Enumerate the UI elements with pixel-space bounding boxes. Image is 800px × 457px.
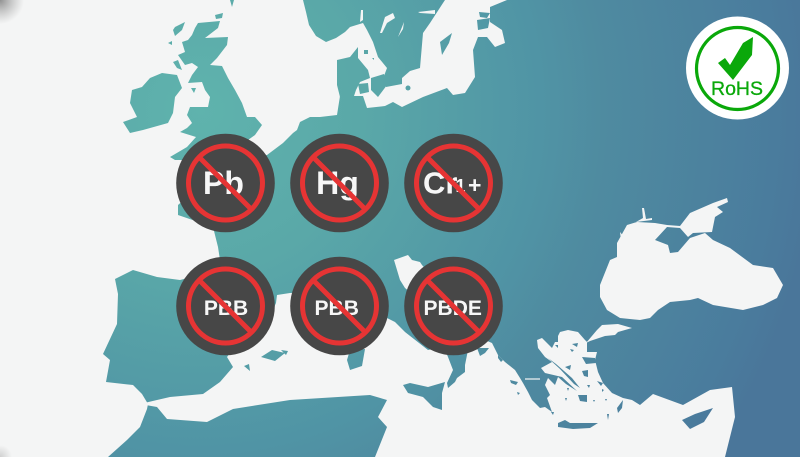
Estonian islands xyxy=(477,12,490,30)
map: Black Sea spikes xyxy=(620,208,652,240)
badge: Cr: 1 xyxy=(456,176,466,196)
map: Atlantic, North Sea and Baltic xyxy=(0,0,507,457)
Evia gulf xyxy=(548,358,580,388)
icon: check mark xyxy=(718,37,753,80)
badge: Hg xyxy=(290,134,389,232)
Ireland xyxy=(123,73,182,133)
badge: PBB right: PBB xyxy=(315,297,359,320)
Aegean islands xyxy=(498,335,607,415)
badge: PBB left: PBB xyxy=(204,297,248,320)
Swedish lakes xyxy=(360,10,435,37)
Kattegat islet dots xyxy=(364,50,374,60)
RoHS compliance badge: RoHS xyxy=(711,78,763,100)
Hebrides and northern islands xyxy=(168,0,234,93)
map: Mediterranean, Adriatic and Aegean xyxy=(140,255,735,457)
Gulf of Corinth xyxy=(525,378,540,380)
Jutland xyxy=(337,47,370,97)
badge: PBDE xyxy=(404,257,503,355)
corner vignette xyxy=(0,0,24,24)
badge: Pb xyxy=(176,134,275,232)
Crete xyxy=(558,420,598,429)
badge: Hg: Hg xyxy=(316,165,359,201)
map: Black Sea and Azov xyxy=(600,198,783,320)
map: Marmara xyxy=(586,324,632,343)
Gotland xyxy=(440,33,452,55)
badge: PBDE: PBDE xyxy=(424,297,482,320)
badge: Pb: Pb xyxy=(203,165,244,201)
badge: PBB right xyxy=(290,257,389,355)
Sardinia xyxy=(347,349,365,370)
badge: PBB left xyxy=(176,257,275,355)
badge: Cr xyxy=(404,134,503,232)
Bornholm xyxy=(406,86,410,90)
badge: Cr: + xyxy=(468,172,481,198)
Italy heel xyxy=(477,348,489,356)
Great Britain xyxy=(170,21,262,160)
badge: Cr: Cr xyxy=(423,166,457,200)
RoHS compliance badge xyxy=(686,16,789,120)
map: teal islands and peninsulas xyxy=(123,0,713,429)
Italy boot xyxy=(445,350,468,388)
Cyprus xyxy=(682,408,713,429)
Danish islands xyxy=(358,74,387,97)
Balearics xyxy=(244,350,288,371)
Rhodes and Karpathos xyxy=(607,400,623,420)
Sicily xyxy=(403,382,445,410)
